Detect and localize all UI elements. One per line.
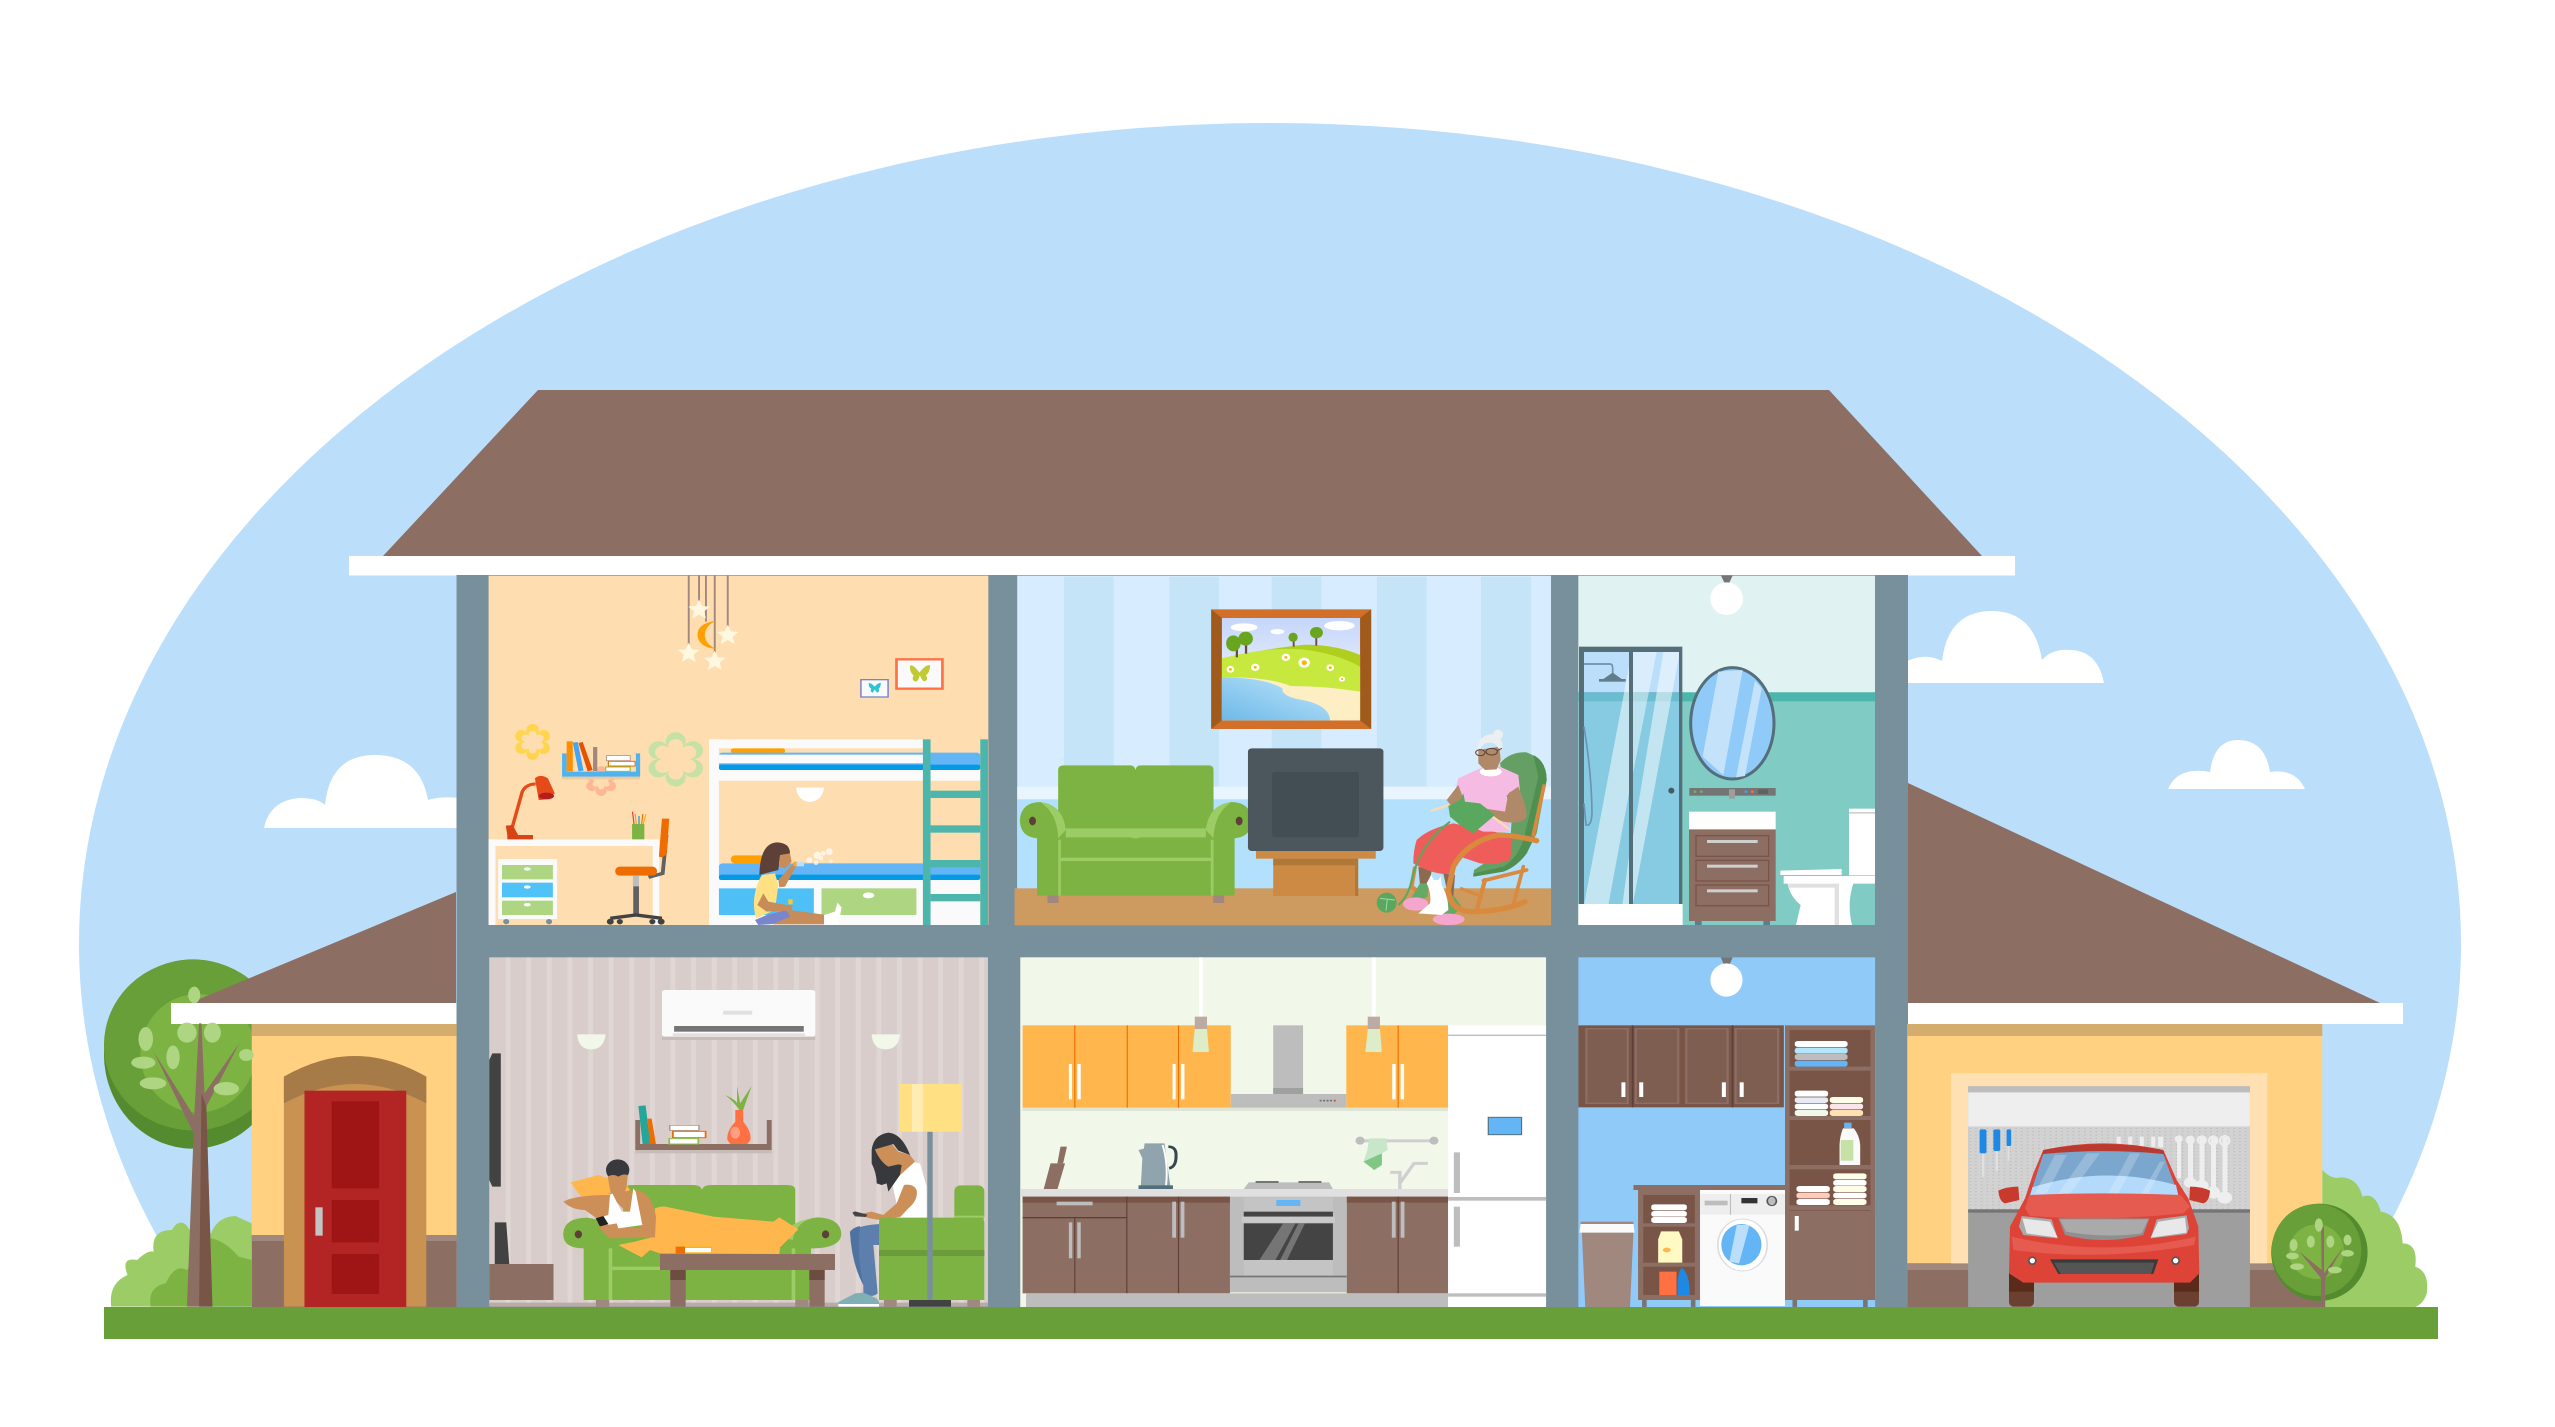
house frame walls <box>456 575 1908 1310</box>
phone <box>852 1211 867 1217</box>
girl blowing bubbles <box>754 842 842 925</box>
garage soffit band <box>1907 1024 2322 1036</box>
floor speaker and console <box>489 1222 554 1300</box>
wall shelf <box>635 1086 772 1153</box>
detergent bottle <box>1840 1123 1860 1165</box>
pink blouse <box>1450 767 1521 832</box>
laundry hamper <box>1580 1222 1635 1307</box>
red car <box>1998 1143 2210 1307</box>
wall tv <box>489 1053 501 1187</box>
desk chair <box>607 819 669 925</box>
bathroom wall <box>1578 576 1875 925</box>
woman on armchair <box>837 1132 984 1307</box>
bedroom wall <box>489 576 988 925</box>
wing soffit band <box>252 1024 457 1036</box>
left wing eave <box>171 1003 457 1024</box>
kitchen wall <box>1020 957 1546 1307</box>
pendant lamp right <box>1365 957 1382 1052</box>
car mirrors <box>1998 1187 2210 1203</box>
door arch <box>284 1056 426 1307</box>
jeans <box>850 1224 880 1296</box>
armchair <box>879 1185 984 1307</box>
counter top <box>1020 1189 1448 1197</box>
head and hair <box>1476 730 1503 770</box>
wall flower green <box>648 732 703 786</box>
oval mirror <box>1691 668 1774 779</box>
faucet shelf <box>1689 788 1776 799</box>
green sofa <box>1020 765 1252 903</box>
towel stacks <box>1795 1041 1867 1205</box>
drawer unit <box>498 859 557 924</box>
lounge sofa <box>563 1185 841 1307</box>
lower cabinets <box>1023 1197 1448 1293</box>
tall shelf unit <box>1785 1025 1875 1307</box>
fog lights <box>2028 1256 2180 1265</box>
television <box>1248 748 1383 851</box>
tv stand <box>1256 851 1376 896</box>
wing base top strip <box>252 1235 457 1241</box>
car roof <box>2042 1144 2165 1156</box>
red door <box>304 1091 406 1307</box>
left wing roof <box>190 892 456 1003</box>
coffee table with books <box>660 1247 835 1307</box>
upper laundry cabinets <box>1578 1025 1784 1107</box>
collar <box>1480 767 1502 776</box>
wall flower yellow <box>515 724 550 760</box>
right wing and laundry <box>1578 957 2427 1307</box>
rocking chair <box>1412 752 1547 908</box>
yarn ball <box>1377 893 1397 913</box>
faucet <box>1390 1163 1428 1189</box>
arms and knitting <box>1398 785 1527 905</box>
plinth <box>1026 1293 1448 1307</box>
upper cabinets <box>1023 1025 1448 1111</box>
floor <box>1015 888 1551 925</box>
large butterfly frame <box>897 659 942 689</box>
bunk bed <box>709 739 980 925</box>
car wheels <box>2009 1273 2199 1307</box>
small shelf unit <box>1638 1190 1700 1307</box>
rocker frame front <box>1448 835 1537 912</box>
upper grille <box>2058 1218 2149 1240</box>
hair <box>872 1133 910 1192</box>
door arch top <box>284 1056 426 1103</box>
shoes <box>837 1293 879 1307</box>
left tree crown and bush <box>104 959 282 1307</box>
ladder <box>923 739 988 925</box>
lounge <box>489 957 988 1307</box>
cloud right large <box>1905 611 2104 683</box>
washer worktop <box>1633 1185 1785 1190</box>
garage base <box>1907 1263 2322 1307</box>
range hood <box>1231 1025 1346 1108</box>
laundry wall <box>1578 957 1875 1307</box>
floor lamp stand <box>909 1132 951 1307</box>
right wing roof <box>1908 783 2380 1003</box>
arm <box>858 1185 917 1220</box>
lower grille <box>2050 1259 2158 1274</box>
wall flower pink <box>586 766 616 796</box>
tree trunk and leaves <box>131 987 254 1307</box>
kitchen <box>1020 957 1546 1307</box>
pendant lamp left <box>1192 957 1209 1052</box>
right wing eave <box>1907 1003 2403 1024</box>
shower cabin <box>1578 647 1683 925</box>
desk <box>489 839 659 925</box>
ground <box>104 1307 2438 1339</box>
garage opening <box>1951 1073 2267 1307</box>
living room wall <box>1017 576 1551 889</box>
lounge wall <box>489 957 988 1307</box>
garage wall <box>1907 1024 2322 1307</box>
hood <box>2025 1193 2190 1218</box>
small butterfly frame <box>861 680 888 697</box>
left wing with door and tree <box>131 987 457 1307</box>
face and neck <box>875 1144 915 1177</box>
ceiling lamp <box>1710 957 1743 997</box>
main roof <box>383 390 1982 556</box>
white cat <box>1418 875 1448 915</box>
hanging tools <box>1980 1129 2232 1204</box>
towel rail <box>1355 1137 1439 1170</box>
air conditioner <box>662 990 815 1040</box>
oven <box>1230 1197 1347 1292</box>
bathroom <box>1578 576 1875 925</box>
washing machine <box>1700 1190 1785 1306</box>
wing wall <box>252 1024 457 1307</box>
sky ellipse <box>79 123 2461 1320</box>
pencil cup <box>632 812 646 839</box>
right bush <box>2322 1170 2427 1307</box>
headlights <box>2019 1215 2189 1238</box>
kettle <box>1139 1143 1176 1189</box>
vanity cabinet <box>1689 812 1776 925</box>
grandmother in rocking chair <box>1377 730 1547 925</box>
book shelf <box>562 741 640 779</box>
toilet <box>1780 809 1875 925</box>
shins and slippers <box>1403 867 1465 925</box>
car body <box>2009 1143 2199 1283</box>
cloud left <box>264 755 460 828</box>
cooktop <box>1244 1181 1333 1189</box>
white shirt <box>892 1162 927 1218</box>
desk lamp <box>506 776 555 840</box>
floor lamp shade <box>899 1084 962 1132</box>
living room <box>1015 576 1551 925</box>
red skirt <box>1413 823 1512 874</box>
wing base <box>252 1235 457 1307</box>
man lying on sofa <box>563 1159 656 1238</box>
bedroom <box>489 576 988 925</box>
bumper highlight <box>2012 1237 2196 1255</box>
ceiling lamp <box>1710 576 1743 615</box>
wall sconces <box>577 1034 900 1049</box>
refrigerator <box>1448 1025 1546 1307</box>
windshield <box>2030 1151 2178 1196</box>
hanging mobile <box>678 576 738 670</box>
knife block <box>1044 1147 1067 1189</box>
painting <box>1211 609 1371 729</box>
small tree <box>2271 1204 2368 1307</box>
orange blanket <box>618 1207 798 1257</box>
main eave <box>349 556 2015 576</box>
cloud right small <box>2168 740 2305 789</box>
